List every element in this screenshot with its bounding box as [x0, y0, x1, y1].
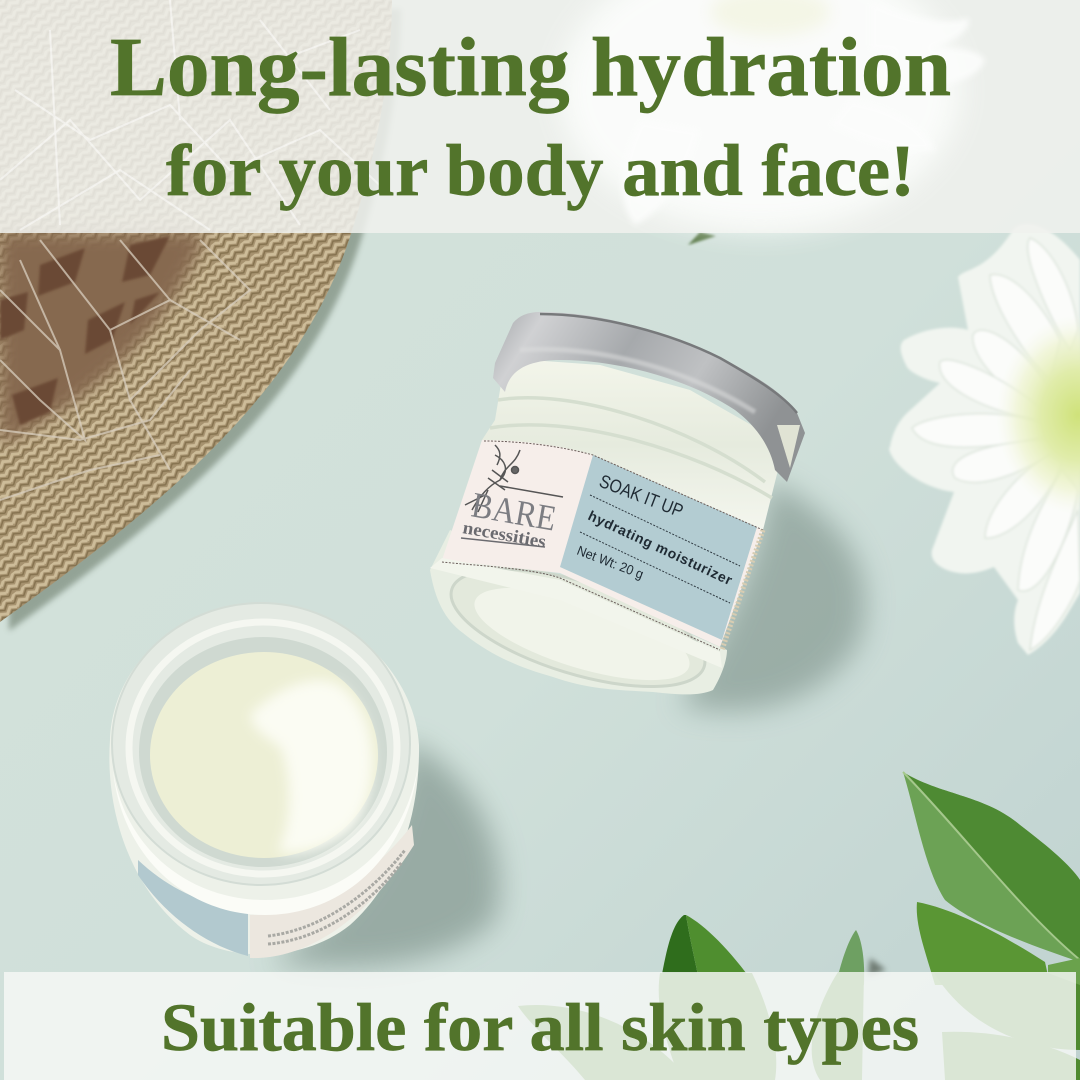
lower leaf parts under banner	[518, 972, 1080, 1080]
basket shadow	[9, 9, 401, 631]
jar lower label: blue	[138, 860, 248, 956]
jar neck	[482, 360, 778, 530]
flower pale centre	[710, 0, 830, 36]
product type: hydrating moisturizer	[586, 507, 735, 588]
fibre mesh	[0, 240, 250, 500]
flower yellow centre	[996, 315, 1080, 515]
glass thread	[113, 765, 418, 915]
flower silhouette	[889, 224, 1080, 655]
product name: SOAK IT UP	[597, 470, 686, 521]
top banner fibres	[0, 0, 385, 230]
glass base	[430, 530, 727, 694]
top flower glow through banner	[560, 0, 985, 230]
shadow: closed jar	[680, 480, 866, 711]
brown weave patches	[0, 236, 170, 425]
second leaf	[917, 902, 1050, 985]
brand line	[500, 486, 563, 497]
woven basket	[0, 0, 401, 631]
closed jar	[430, 312, 805, 711]
net weight: Net Wt: 20 g	[575, 543, 646, 582]
jar label	[430, 440, 763, 668]
brand floral sketch	[465, 445, 520, 512]
flower upper petals	[622, 0, 985, 225]
small leaf tip under top flower	[688, 232, 716, 245]
footer claim: Suitable for all skin types	[161, 989, 919, 1065]
jar rim	[112, 603, 410, 885]
label dotted border	[442, 441, 763, 650]
large leaf	[903, 772, 1080, 962]
moisturizer cream	[150, 652, 378, 858]
label cream panel	[442, 440, 763, 647]
basket dark centre	[0, 233, 205, 445]
heading	[110, 21, 951, 211]
jar serrated edge	[722, 530, 763, 650]
bottom banner	[4, 972, 1076, 1080]
label blue panel	[560, 455, 757, 640]
top banner	[0, 0, 1080, 233]
leaves	[518, 772, 1080, 1080]
brand name: BARE	[469, 484, 559, 539]
heading line 1: Long-lasting hydration	[110, 21, 951, 114]
third leaf	[660, 915, 700, 985]
brand subname: necessities	[461, 517, 548, 552]
label dividers	[580, 495, 740, 603]
heading line 2: for your body and face!	[166, 130, 915, 211]
jar lower label: ingredients	[250, 825, 414, 958]
flower white bloom	[560, 0, 960, 230]
open jar	[109, 603, 419, 958]
right white flower	[889, 224, 1080, 655]
shadow: open jar	[270, 740, 500, 967]
flower petal shading	[912, 238, 1080, 650]
silver lid	[493, 312, 805, 482]
small leaf	[836, 930, 864, 985]
basket rim	[0, 0, 392, 622]
jar body	[109, 603, 419, 954]
